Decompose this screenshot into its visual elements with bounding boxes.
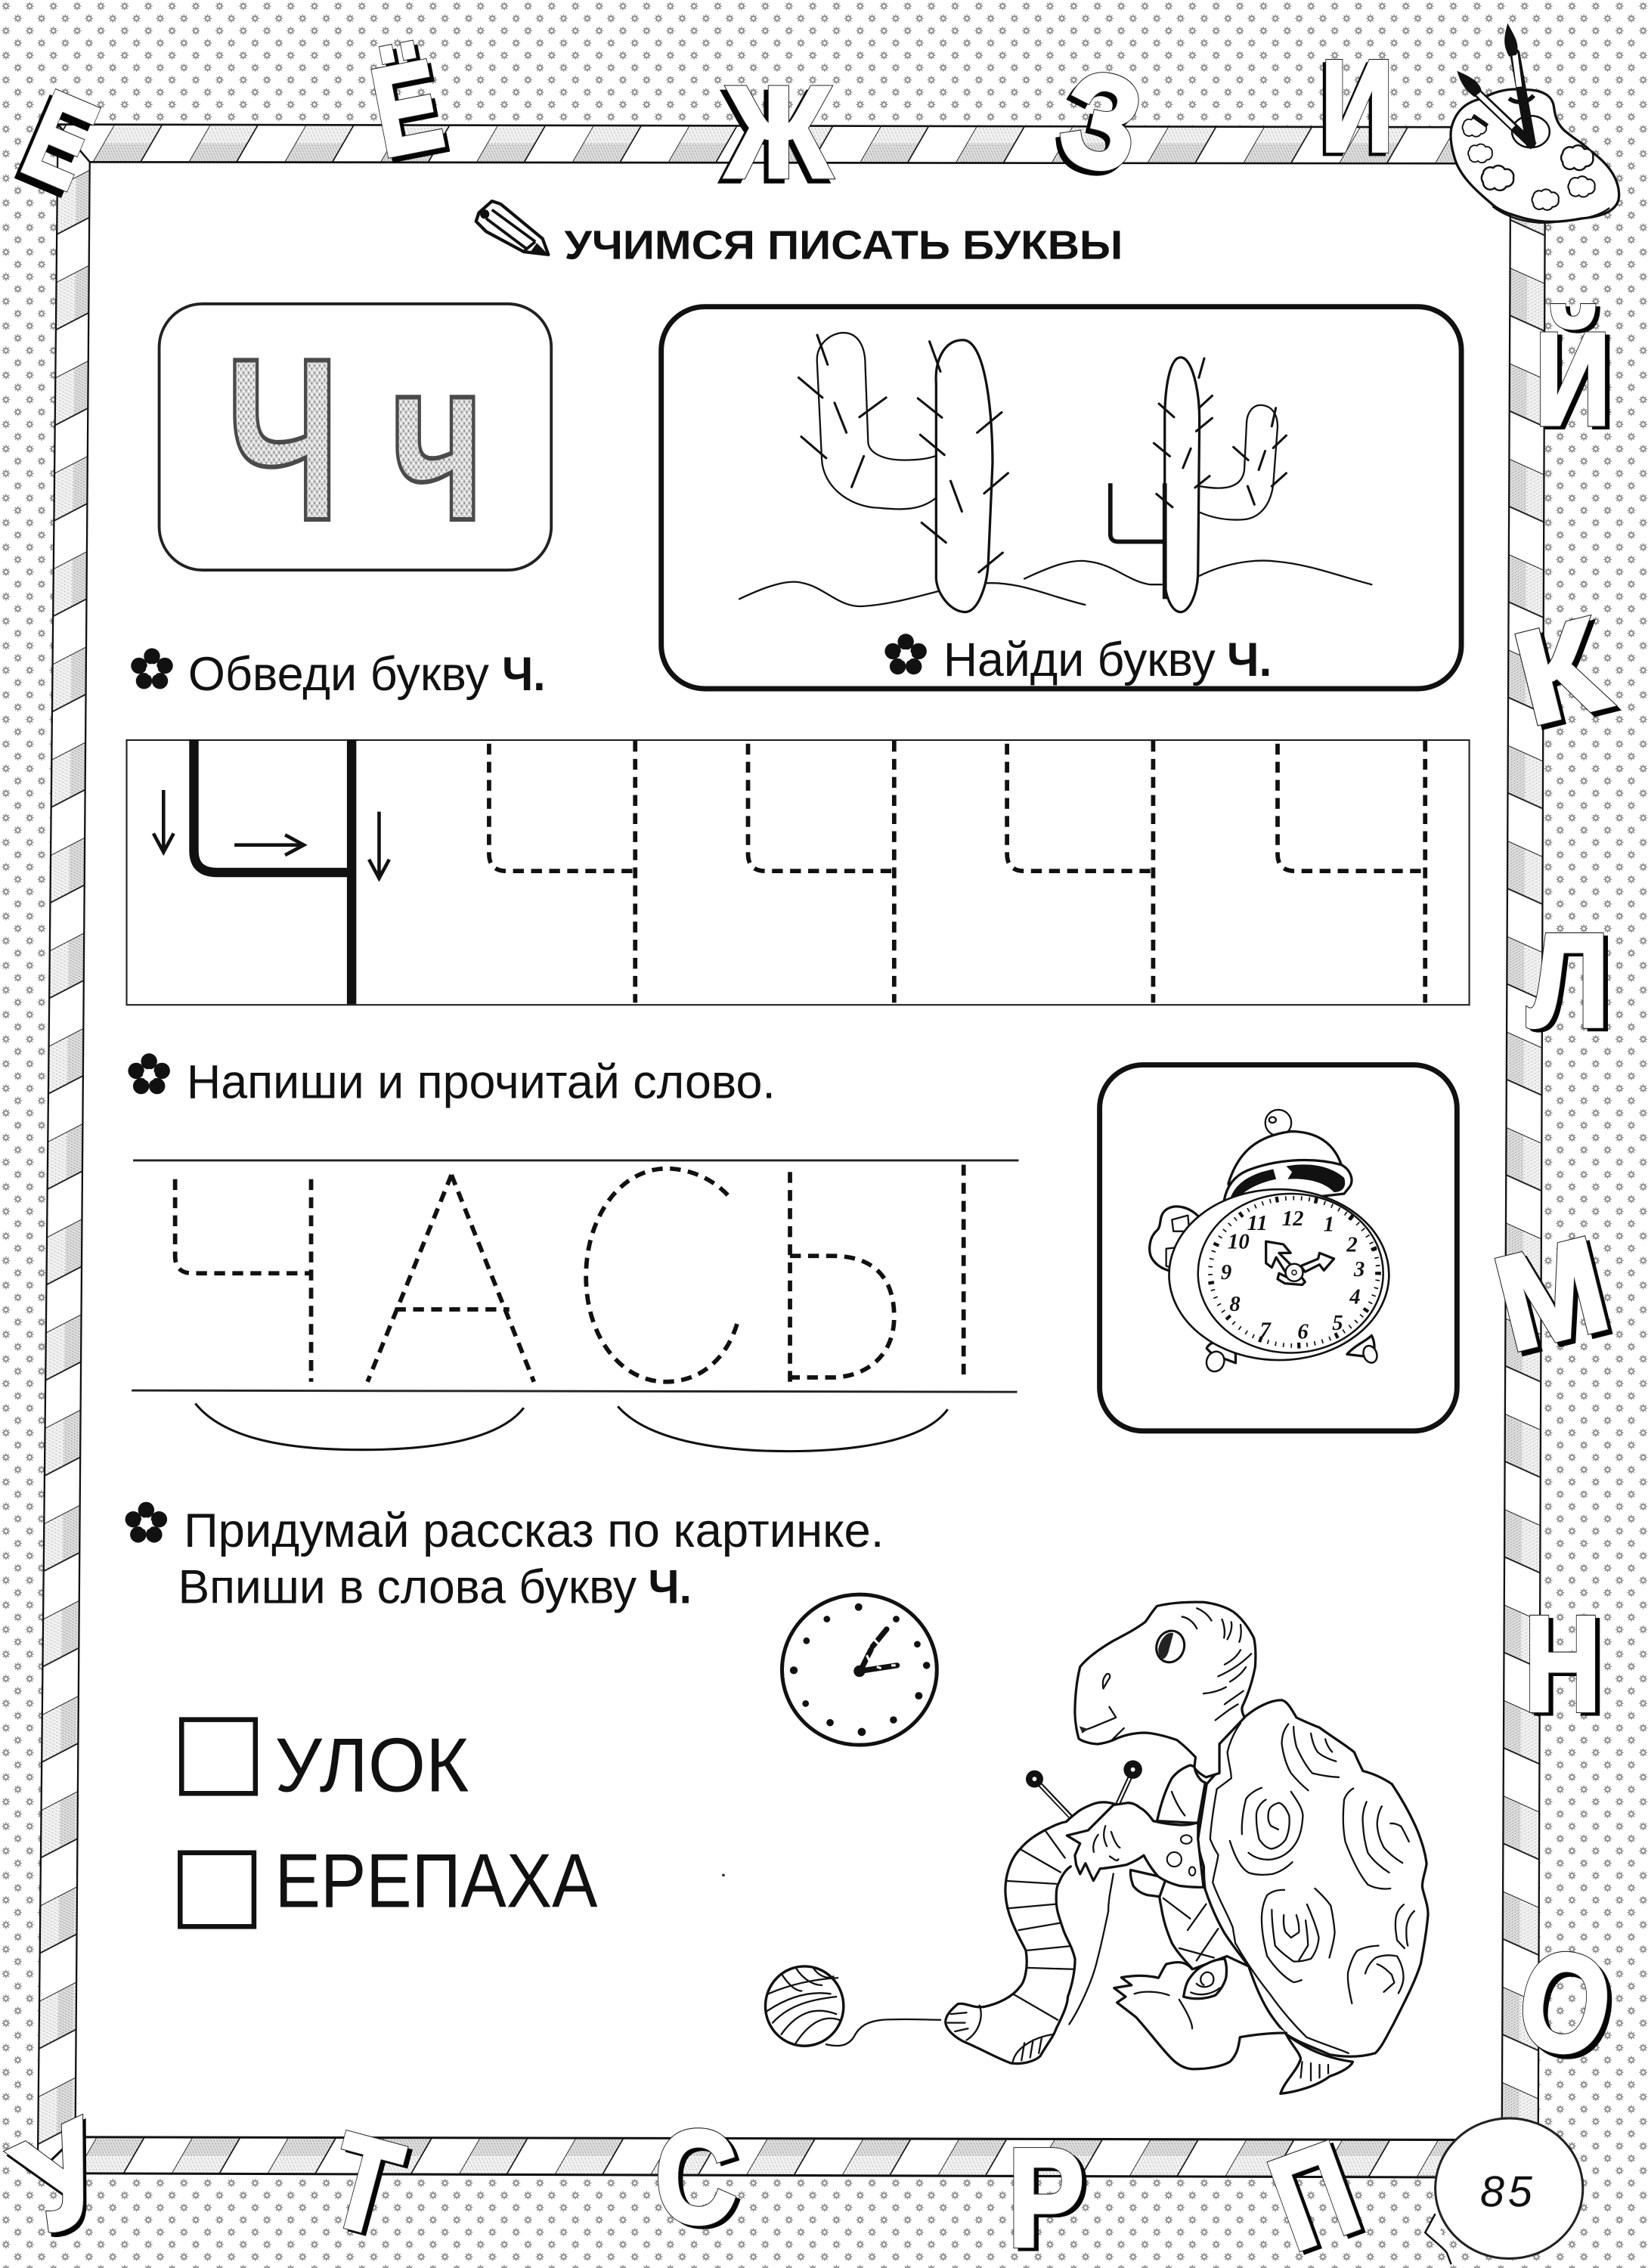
instruction: trace the letter: Обведи букву (188, 648, 489, 701)
instruction: make up a story (125, 1502, 884, 1614)
paint blobs (1462, 118, 1595, 210)
clock numerals: 9 (1221, 1260, 1231, 1284)
letter Л: Л (1528, 906, 1609, 1054)
clock numerals: 11 (1247, 1211, 1268, 1235)
page number badge (1425, 2118, 1583, 2264)
letter Ж: Ж (721, 65, 828, 209)
clock numerals: 1 (1324, 1213, 1334, 1237)
letter Ж: Ж (725, 60, 832, 204)
letter Н: Н (1525, 1589, 1600, 1739)
panel: find the letter in cacti (661, 307, 1461, 689)
letter М: М (1482, 1210, 1621, 1379)
letter О: О (1508, 1919, 1622, 2087)
icon: artist palette with brushes (1451, 23, 1619, 223)
letter Ё: Ё (362, 34, 452, 183)
page number badge: 85 (1480, 2168, 1533, 2217)
letter И: И (1321, 35, 1393, 178)
letter З: З (1048, 41, 1154, 203)
title: pencil icon and heading (476, 201, 1123, 268)
large cactus (739, 333, 1085, 612)
illustration: knitting turtle (765, 1602, 1428, 2093)
under arm (1130, 1870, 1166, 1897)
icon: wall clock (782, 1594, 937, 1745)
knitting needles (1026, 1760, 1142, 1829)
letter К: К (1502, 590, 1619, 752)
letter З: З (1043, 45, 1150, 207)
letter С: С (660, 2107, 741, 2254)
shell swirls (1230, 1788, 1303, 1875)
instruction: find the letter: Найди букву (943, 634, 1216, 686)
clock bell (1224, 1110, 1352, 1207)
letter С: С (655, 2104, 736, 2251)
letter О: О (1508, 1919, 1622, 2087)
instruction: write and read the word: Напиши и прочитай слово. (187, 1056, 776, 1109)
neck and head (1075, 1602, 1256, 1777)
uppercase letter: Ч (226, 311, 340, 569)
syllable arcs (195, 1403, 948, 1452)
exercise: first word with missing letter (181, 1720, 469, 1808)
striped sock (946, 1802, 1116, 2064)
letter И: И (1318, 38, 1390, 181)
instruction: make up a story: Впиши в слова букву (178, 1561, 637, 1614)
icon: pencil (476, 201, 548, 255)
letter Е: Е (2, 71, 107, 221)
letter Л: Л (1528, 906, 1609, 1054)
letter У: У (0, 2097, 135, 2265)
clock face ticks (1210, 1198, 1378, 1346)
clock hands (1266, 1241, 1334, 1285)
exercise: second word with missing letter (180, 1838, 598, 1926)
letter Й: Й (1540, 308, 1615, 455)
letter Ё: Ё (367, 39, 457, 187)
small cactus with hidden letter (1024, 358, 1371, 612)
winding knob (1150, 1207, 1203, 1272)
letter Й: Й (1535, 305, 1610, 452)
instruction: make up a story: Ч. (648, 1561, 692, 1614)
exercise: second word with missing letter: ЕРЕПАХА (275, 1838, 598, 1923)
letter Т: Т (315, 2106, 414, 2264)
letter М: М (1487, 1214, 1625, 1383)
letter К: К (1507, 595, 1624, 757)
solid letter with stroke arrows (153, 739, 389, 1004)
brush heads (1504, 23, 1518, 57)
head details (1080, 1608, 1251, 1741)
shell (1198, 1700, 1428, 2056)
stray print speck (722, 1873, 725, 1876)
chest (1157, 1765, 1205, 1823)
letter И: И (1321, 35, 1393, 178)
instruction: make up a story: Придумай рассказ по картинке. (184, 1504, 884, 1557)
front foot and leg (1114, 1963, 1286, 2069)
clock numerals: 4 (1349, 1284, 1361, 1309)
yarn strand from needles (1069, 1873, 1114, 2025)
clock numerals: 5 (1332, 1311, 1343, 1335)
lowercase letter: ч (391, 311, 485, 569)
exercise: first word with missing letter: УЛОК (275, 1722, 469, 1808)
clock numerals: 7 (1260, 1318, 1272, 1342)
letter У: У (0, 2093, 132, 2260)
torso behind arm (1159, 1876, 1249, 1969)
letter Н: Н (1525, 1589, 1600, 1739)
letter Е: Е (7, 65, 113, 215)
instruction: trace the letter: Ч. (502, 648, 546, 701)
panel: alarm clock (1100, 1065, 1457, 1431)
letter Т: Т (320, 2109, 418, 2267)
letter Л: Л (1532, 909, 1613, 1057)
heading: УЧИМСЯ ПИСАТЬ БУКВЫ (564, 223, 1123, 268)
clock numerals (1221, 1207, 1365, 1343)
letter К: К (1502, 590, 1619, 752)
letter Ж: Ж (725, 60, 832, 204)
panel: tracing strip (127, 739, 1470, 1005)
letter С: С (655, 2104, 736, 2251)
knitting arm (1067, 1803, 1203, 1887)
clock numerals: 2 (1346, 1233, 1358, 1257)
clock numerals: 10 (1228, 1230, 1250, 1254)
letter З: З (1048, 41, 1154, 203)
yarn ball (765, 1966, 940, 2046)
clock body (1169, 1189, 1389, 1360)
panel: letter card (160, 304, 551, 570)
clock numerals: 3 (1353, 1257, 1365, 1281)
letter Й: Й (1535, 305, 1610, 452)
brush handles (1515, 54, 1531, 143)
letter Т: Т (315, 2106, 414, 2264)
belly dots (1167, 1835, 1195, 1876)
letter Ё: Ё (362, 34, 452, 183)
letter О: О (1513, 1923, 1627, 2092)
letter М: М (1482, 1210, 1621, 1379)
clock feet (1203, 1336, 1380, 1374)
clock numerals: 6 (1297, 1319, 1309, 1343)
letter Н: Н (1529, 1591, 1605, 1742)
wall clock hands (860, 1629, 897, 1672)
letter У: У (0, 2093, 132, 2260)
yarn thread (826, 2019, 940, 2046)
word tracing: dashed ЧАСЫ on ruled lines (132, 1160, 1018, 1452)
letter Е: Е (7, 65, 113, 215)
instruction: find the letter: Ч. (1227, 634, 1272, 686)
dashed letters (489, 741, 635, 1002)
tail flipper (1281, 2034, 1353, 2093)
clock numerals: 12 (1282, 1207, 1303, 1231)
clock numerals: 8 (1229, 1292, 1241, 1316)
